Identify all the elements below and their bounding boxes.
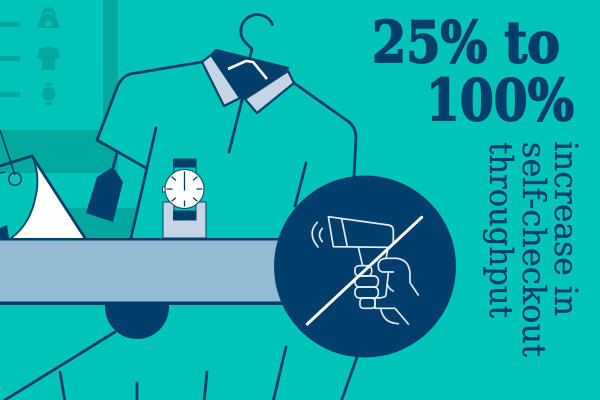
folded garment on counter: [0, 130, 85, 238]
icon: shirt on shelf: [37, 46, 60, 70]
background shelving: [0, 0, 138, 240]
collar: [202, 50, 294, 113]
wristwatch on stand: [162, 159, 206, 238]
shirt on hanger: [97, 15, 356, 238]
checkout counter: [0, 238, 300, 305]
headline: 100%: [426, 67, 574, 134]
rotated caption: increase in: [547, 141, 585, 316]
no-scanner badge: [274, 176, 456, 358]
rotated caption: throughput: [482, 142, 520, 318]
icon: crossed-out barcode scanner in hand: [307, 217, 422, 324]
rotated caption: [482, 141, 585, 357]
shirt body fill: [97, 62, 354, 238]
hanger hook: [241, 15, 272, 57]
pedestal under counter: [105, 275, 169, 339]
icon: watch on shelf: [42, 83, 56, 105]
headline: 25% to: [372, 9, 560, 76]
icon: handbag on shelf: [37, 7, 60, 28]
lower garment lines: [5, 332, 357, 400]
rotated caption: self-checkout: [515, 142, 553, 357]
price tag: [86, 153, 123, 222]
shirt outline: [97, 62, 202, 168]
headline: [372, 9, 574, 134]
